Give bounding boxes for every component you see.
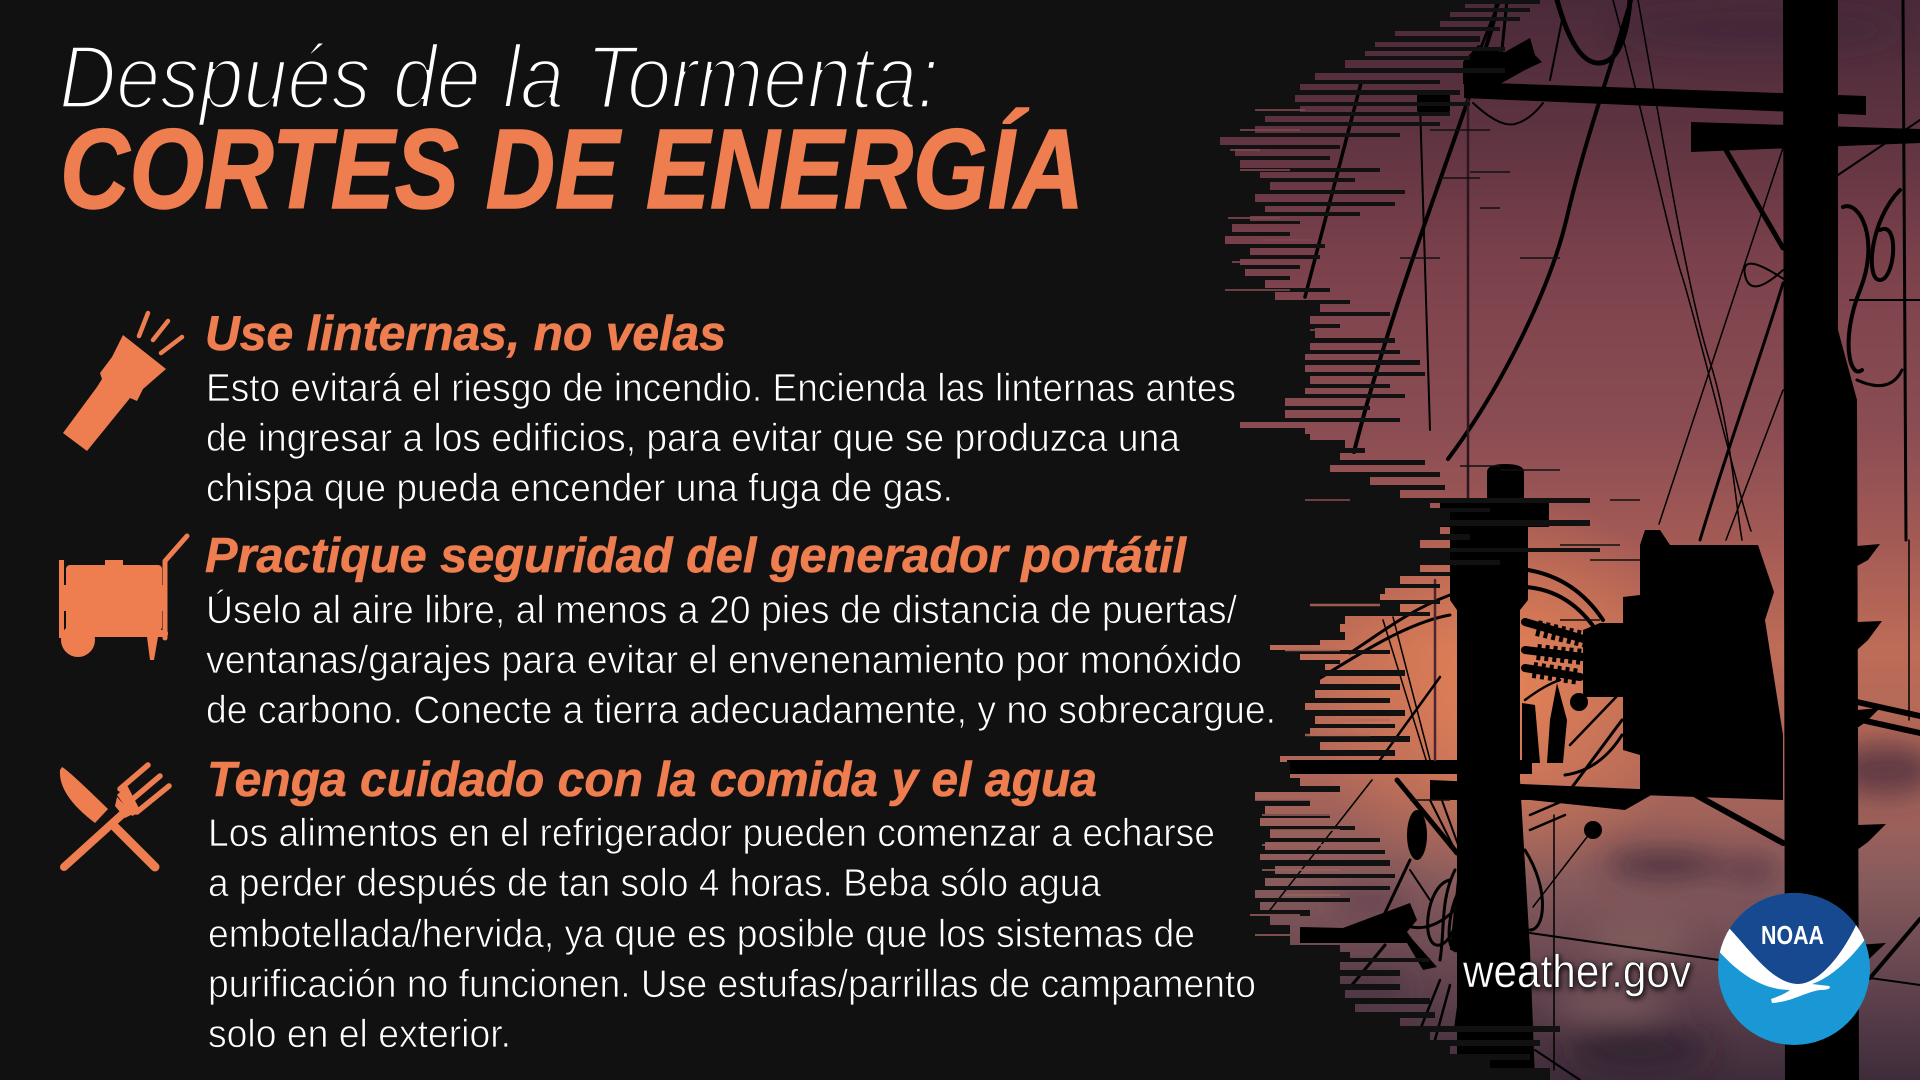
body text [208, 812, 1256, 1056]
sky [1180, 0, 1920, 1080]
icon: knife and fork [60, 765, 169, 867]
title line 2: CORTES DE ENERGÍA [60, 106, 1084, 232]
heading: Practique seguridad del generador portátil [205, 529, 1187, 583]
section: generator [59, 529, 1276, 732]
body text: de carbono. Conecte a tierra adecuadamente, y no sobrecargue. [206, 689, 1276, 732]
body text: ventanas/garajes para evitar el envenenamiento por monóxido [206, 639, 1242, 682]
icon: flashlight [63, 313, 182, 451]
body text: a perder después de tan solo 4 horas. Beba sólo agua [208, 862, 1102, 905]
body text: Úselo al aire libre, al menos a 20 pies de distancia de puertas/ [206, 589, 1237, 632]
heading: Tenga cuidado con la comida y el agua [207, 753, 1097, 807]
weather.gov link text: weather.gov [1462, 945, 1691, 997]
clouds [1310, 12, 1920, 1072]
brush streaks [1400, 130, 1640, 800]
body text: solo en el exterior. [208, 1013, 511, 1056]
orange glow [1280, 480, 1730, 900]
body text: chispa que pueda encender una fuga de gas. [206, 467, 953, 510]
section: food and water [60, 753, 1256, 1056]
small pole [1440, 464, 1549, 1080]
NOAA wordmark: NOAA [1761, 920, 1824, 950]
title [59, 28, 1084, 232]
body text [206, 367, 1236, 510]
body text: de ingresar a los edificios, para evitar que se produzca una [206, 417, 1181, 460]
body text: Los alimentos en el refrigerador pueden comenzar a echarse [208, 812, 1215, 855]
heading: Use linternas, no velas [205, 307, 726, 361]
section: flashlights [63, 307, 1236, 510]
body text: embotellada/hervida, ya que es posible que los sistemas de [208, 913, 1195, 956]
body text [206, 589, 1276, 732]
right pole brackets [1857, 544, 1880, 566]
icon: portable generator [59, 536, 187, 660]
panel: sunset photo of utility poles [1180, 0, 1920, 1080]
lower limb [1300, 903, 1437, 970]
streak gaps [1225, 110, 1360, 500]
body text: Esto evitará el riesgo de incendio. Encienda las linternas antes [206, 367, 1236, 410]
wires [1241, 0, 1920, 1080]
body text: purificación no funcionen. Use estufas/parrillas de campamento [208, 963, 1256, 1006]
silhouette: large pole and crossarms [1287, 0, 1920, 1080]
icon: NOAA logo [1715, 893, 1875, 1045]
title line 1: Después de la Tormenta: [59, 28, 939, 128]
